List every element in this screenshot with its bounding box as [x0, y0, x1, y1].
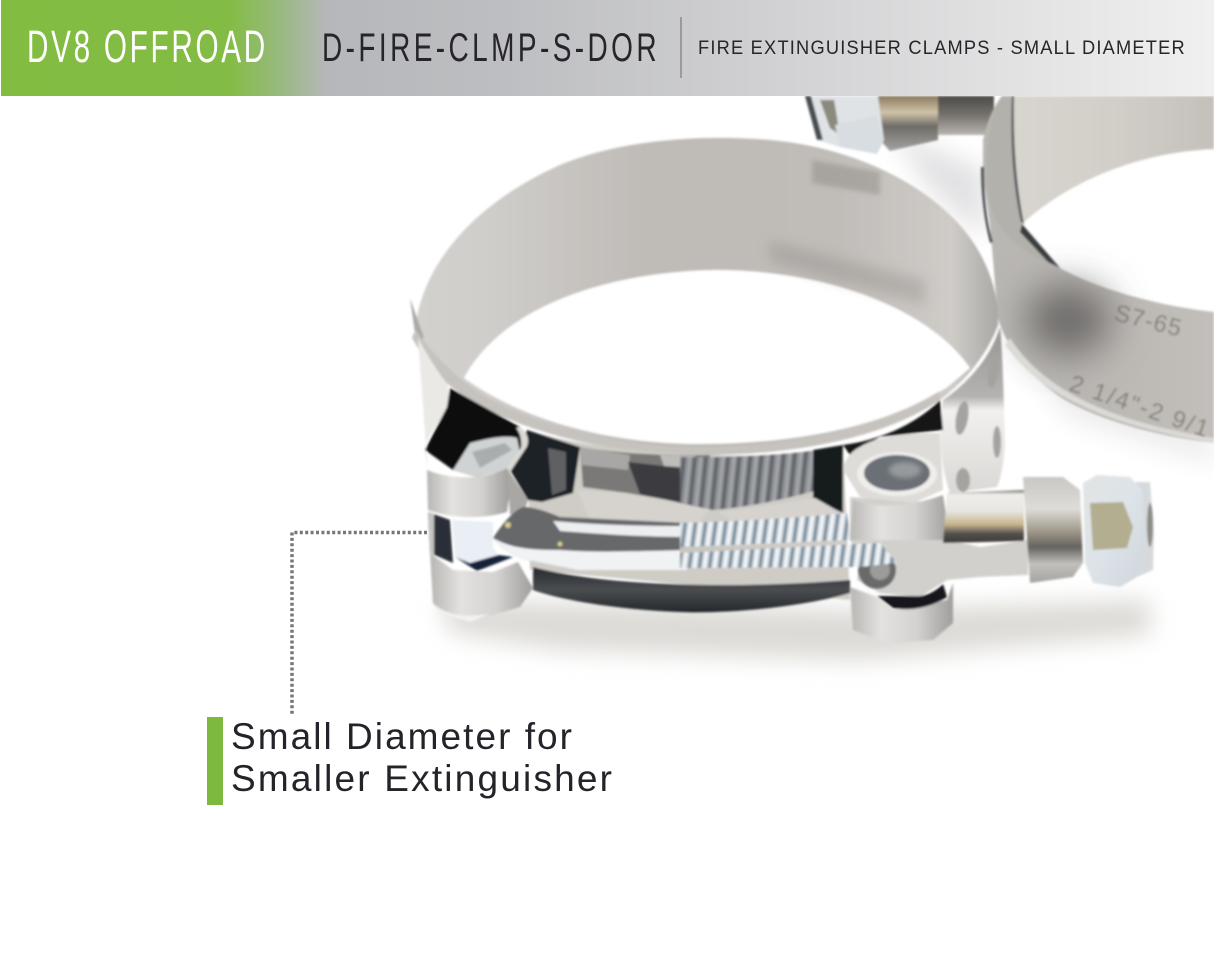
faint stamped marks [812, 160, 880, 195]
stamped marking on background clamp [1066, 300, 1214, 444]
bolt stem, collar and lock nut [943, 475, 1154, 587]
header divider [680, 17, 682, 78]
callout text: Small Diameter for [231, 716, 572, 757]
stamped marking on background clamp: 2 1/4"-2 9/1 [1066, 370, 1214, 444]
brand name: DV8 OFFROAD [27, 22, 265, 73]
dotted leader line [292, 532, 427, 714]
cast shadow under the clamps [440, 130, 1214, 660]
header text [27, 17, 1185, 78]
left trunnion post [427, 468, 528, 571]
threaded bolt section [680, 513, 897, 568]
right foot [850, 583, 953, 643]
right band flap with dimples [941, 327, 1005, 493]
main clamp band interior [410, 138, 998, 455]
stamped marking on background clamp: S7-65 [1112, 300, 1185, 343]
background bolt and nut at top [805, 96, 994, 154]
curved T-bolt shank [493, 507, 687, 570]
lower dark band [533, 567, 850, 612]
left trunnion sliver and black opening with T-bolt head [418, 338, 528, 477]
part number: D-FIRE-CLMP-S-DOR [322, 26, 657, 70]
green accent bar [207, 717, 223, 805]
left foot [430, 553, 533, 622]
product description: FIRE EXTINGUISHER CLAMPS - SMALL DIAMETER [698, 37, 1185, 58]
background clamp band at right [981, 96, 1214, 444]
header bar [1, 0, 1214, 96]
reflective band front with reflected threads [510, 400, 943, 600]
callout text: Smaller Extinguisher [231, 758, 612, 799]
right trunnion with hole [680, 433, 1028, 597]
callout text [231, 716, 612, 799]
